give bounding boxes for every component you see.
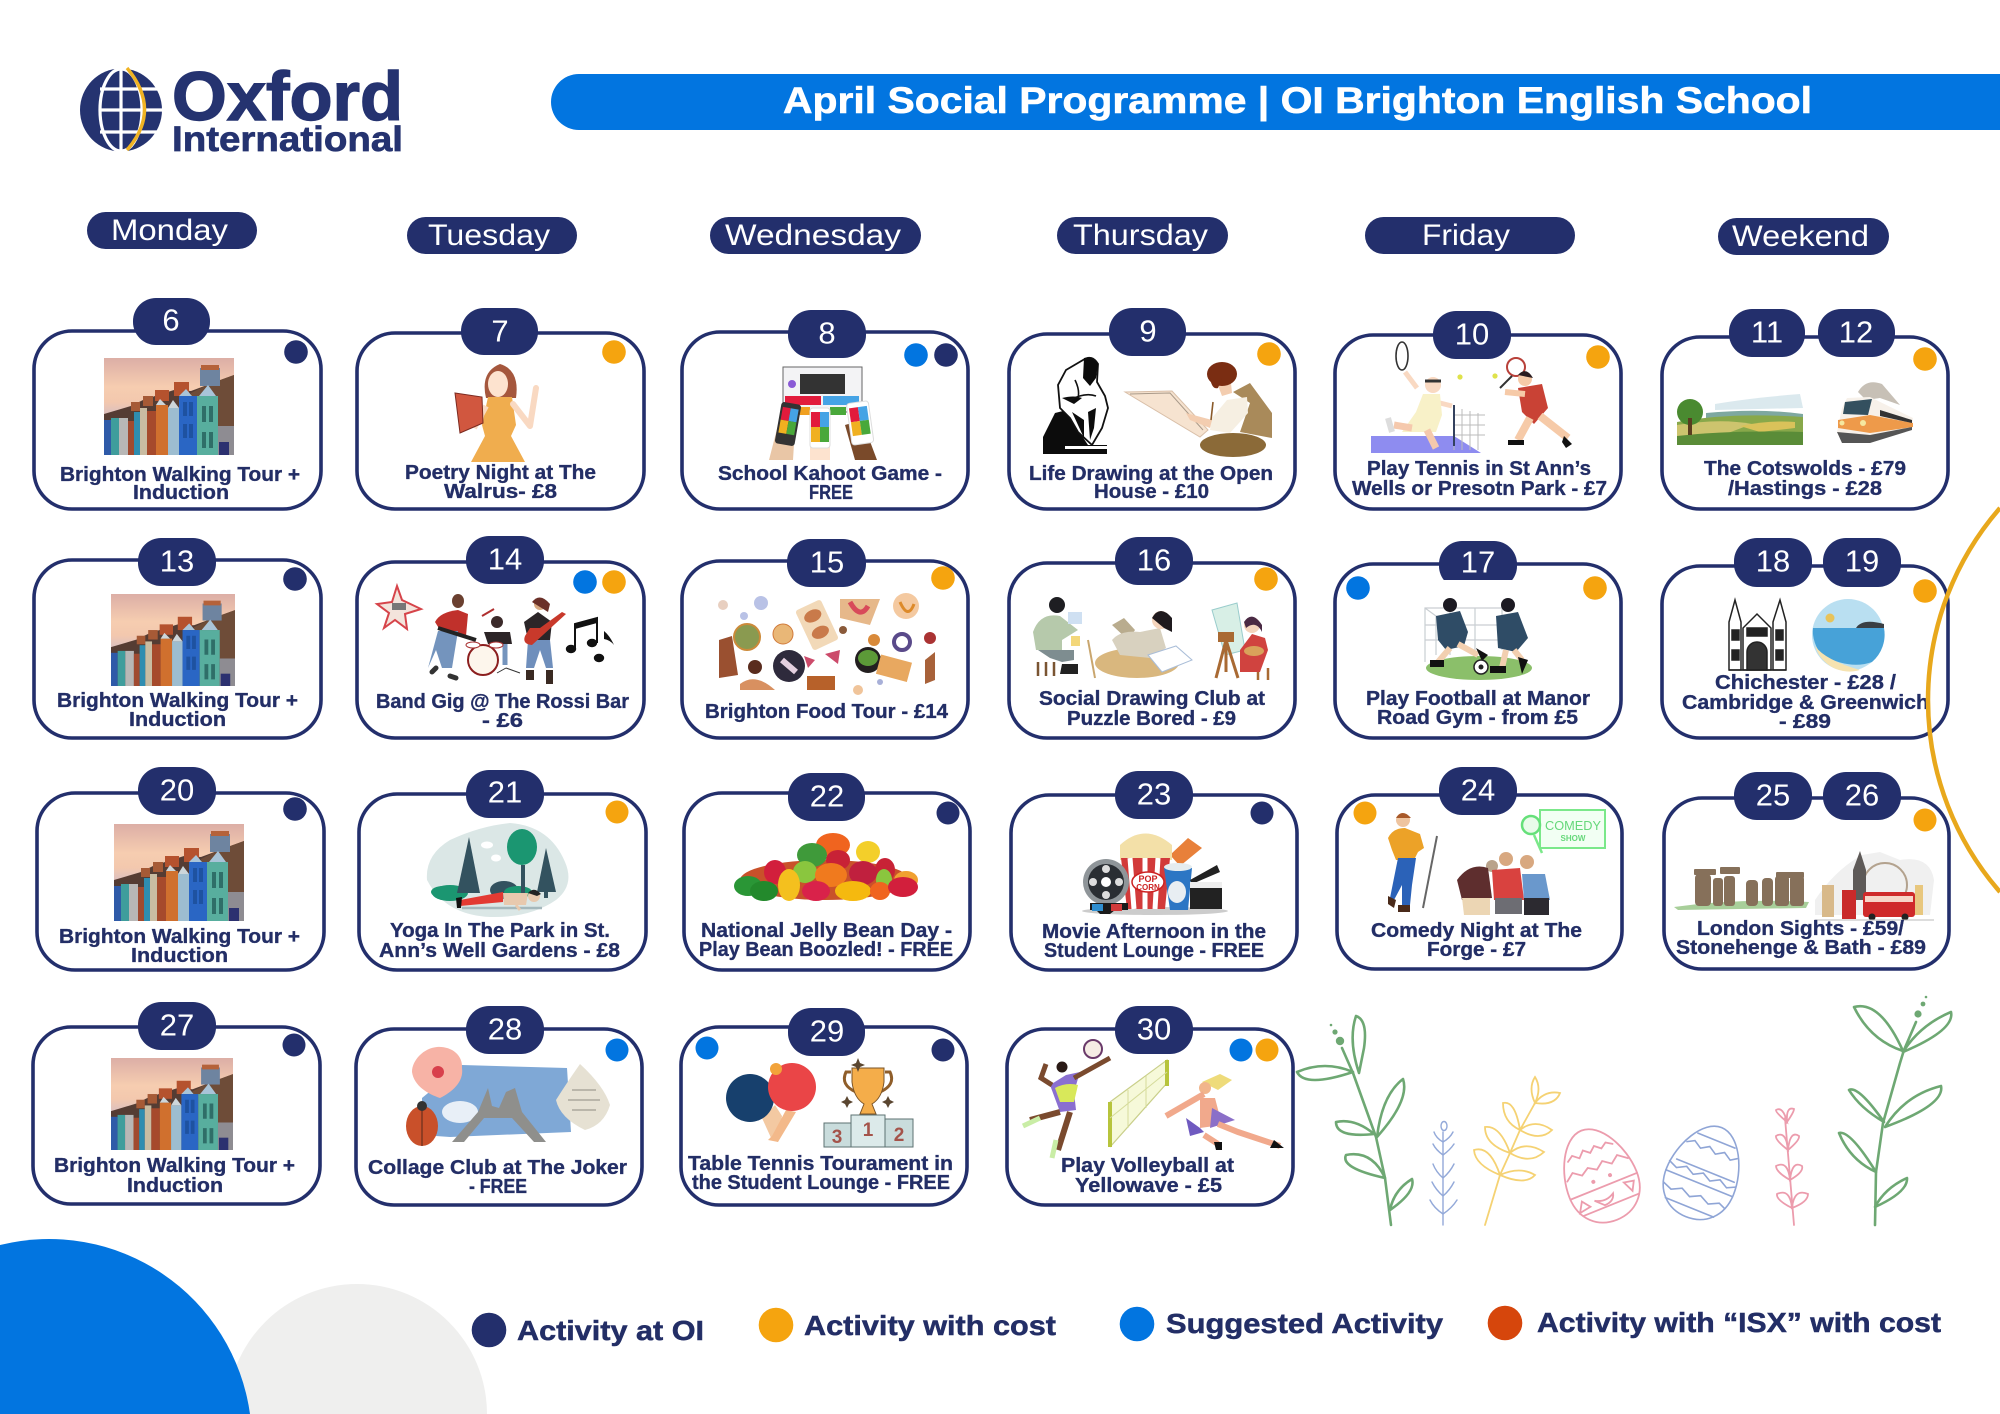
status dot: suggested [573, 570, 597, 594]
date badge 29 [788, 1008, 865, 1056]
date badge 18 [1734, 538, 1812, 587]
activity label [1029, 463, 1273, 503]
date badge 30: 30 [1137, 1012, 1171, 1046]
status dot: suggested [696, 1036, 718, 1060]
illustration: trophy on podium: 2 [894, 1125, 904, 1146]
date badge 6: 6 [162, 302, 180, 338]
activity label [60, 464, 300, 504]
date badge 8 [788, 310, 866, 358]
illustration: food spread [718, 593, 936, 695]
date badge 27 [138, 1002, 216, 1050]
activity label [1061, 1155, 1234, 1197]
activity label: Brighton Walking Tour + [60, 464, 300, 486]
activity label: Band Gig @ The Rossi Bar [376, 691, 629, 713]
date badge 14 [466, 536, 544, 584]
activity label [376, 691, 629, 732]
date badge 28 [466, 1006, 544, 1054]
activity label: Social Drawing Club at [1039, 688, 1265, 710]
activity label: Forge - £7 [1427, 939, 1526, 961]
status dot [1913, 347, 1937, 371]
date badge 21 [466, 770, 544, 818]
status dot [283, 567, 307, 591]
illustration: yoga in park [427, 823, 568, 917]
status dot [936, 802, 960, 824]
illustration: train [1837, 382, 1913, 443]
status dot [1257, 342, 1281, 366]
photo: Brighton houses [111, 594, 235, 686]
activity label [1352, 458, 1607, 500]
date badge 19 [1823, 538, 1901, 587]
activity label: Chichester - £28 / [1715, 672, 1896, 694]
day header: Weekend: Weekend [1732, 220, 1869, 253]
activity label: Ann’s Well Gardens - £8 [379, 940, 620, 962]
day header: Friday: Friday [1422, 219, 1510, 252]
date badge 19: 19 [1845, 544, 1879, 578]
illustration: cinema props: CORN [1136, 883, 1160, 892]
card: 13 Brighton Walking Tour [34, 538, 321, 738]
activity label [59, 926, 300, 967]
activity label: Collage Club at The Joker [368, 1157, 627, 1179]
status dot [931, 566, 955, 590]
card: 22 National Jelly Bean Day [684, 773, 970, 970]
activity label: Brighton Walking Tour + [59, 926, 300, 948]
title banner [551, 74, 2000, 130]
day header: Tuesday [407, 217, 577, 254]
date badge 20 [138, 767, 216, 815]
card: 10 Play Tennis [1335, 311, 1621, 509]
activity label: /Hastings - £28 [1728, 478, 1882, 500]
date badge 29: 29 [810, 1014, 844, 1048]
illustration: comedian [1388, 813, 1437, 912]
illustration: neon comedy sign: SHOW [1561, 834, 1586, 843]
legend item: activity at OI [472, 1313, 704, 1347]
activity label: Student Lounge - FREE [1044, 940, 1264, 962]
activity label: Play Football at Manor [1366, 688, 1590, 710]
activity label [57, 690, 298, 731]
day header: Monday [87, 212, 257, 249]
illustration: artists drawing [1033, 597, 1268, 680]
card: 29 Table Tennis Tournament [681, 1008, 967, 1205]
background circle: grey [227, 1284, 487, 1414]
legend item: suggested activity [1120, 1307, 1443, 1341]
title banner: April Social Programme | OI Brighton English School [783, 80, 1812, 122]
date badge 10: 10 [1455, 316, 1489, 352]
card: 28 Collage Club [356, 1006, 642, 1205]
illustration: laughing audience [1457, 852, 1550, 915]
status dot [284, 340, 308, 364]
date badge 30 [1115, 1006, 1193, 1054]
illustration: jelly beans [734, 833, 918, 901]
illustration: woman reading [455, 364, 536, 462]
card: 25-26 London Sights / Stonehenge & Bath [1664, 772, 1949, 969]
activity label: Play Volleyball at [1061, 1155, 1234, 1177]
activity label: The Cotswolds - £79 [1704, 458, 1906, 480]
illustration: cathedral [1729, 600, 1786, 670]
activity label: Puzzle Bored - £9 [1067, 708, 1236, 730]
activity label: Cambridge & Greenwich [1682, 692, 1929, 714]
status dot [606, 800, 628, 824]
illustration: paddles [726, 1063, 816, 1142]
activity label: the Student Lounge - FREE [692, 1172, 950, 1194]
date badge 9 [1109, 308, 1186, 356]
decoration: orange ring [1928, 508, 2000, 892]
activity label: - £89 [1779, 711, 1831, 733]
date badge 17 [1437, 541, 1519, 592]
illustration: tennis players [1371, 342, 1572, 453]
plant: yellow sprig [1474, 1077, 1560, 1225]
date badge 27: 27 [160, 1008, 194, 1042]
card: 16 Social Drawing Club [1009, 537, 1295, 738]
date badge 12 [1818, 309, 1895, 357]
activity label [1039, 688, 1265, 730]
plant: right green [1839, 996, 1951, 1225]
activity label [405, 462, 596, 503]
icon: blue Easter egg [1652, 1114, 1755, 1230]
date badge 13 [138, 538, 216, 586]
date badge 10 [1433, 311, 1511, 359]
card: 11-12 The Cotswolds / Hastings [1662, 309, 1948, 509]
card: 8 School Kahoot Game [682, 310, 968, 509]
illustration: volleyball match [1023, 1040, 1284, 1158]
activity label [688, 1153, 953, 1194]
date badge 22 [788, 773, 865, 821]
illustration: star sticker [377, 586, 421, 629]
activity label: London Sights - £59/ [1697, 918, 1904, 940]
date badge 7: 7 [491, 314, 509, 348]
illustration: cinema props: POP [1138, 874, 1158, 884]
activity label: FREE [809, 482, 853, 504]
date badge 12: 12 [1839, 314, 1873, 350]
status dot [606, 1038, 628, 1062]
activity label: Yoga In The Park in St. [390, 920, 610, 942]
legend item: suggested activity: Suggested Activity [1166, 1308, 1443, 1339]
date badge 13: 13 [160, 544, 194, 578]
photo: Brighton houses [114, 824, 244, 921]
activity label: Life Drawing at the Open [1029, 463, 1273, 485]
status dot [1586, 345, 1610, 369]
date badge 25 [1734, 772, 1812, 820]
status dot: at OI [932, 1038, 954, 1062]
illustration: neon comedy sign [1522, 810, 1605, 853]
status dot: suggested [1230, 1038, 1252, 1062]
card: 14 Band Gig [357, 536, 644, 738]
activity label: Brighton Walking Tour + [54, 1155, 295, 1177]
plant: pink sprig [1776, 1109, 1808, 1225]
illustration: thinker statue [1043, 358, 1108, 454]
date badge 28: 28 [488, 1012, 522, 1046]
date badge 11 [1729, 309, 1805, 357]
activity label [1042, 921, 1266, 962]
activity label: House - £10 [1094, 481, 1209, 503]
day header: Weekend [1718, 218, 1889, 255]
plant: left green [1297, 1016, 1413, 1225]
day header: Thursday: Thursday [1073, 219, 1208, 252]
card: 21 Yoga In The Park [359, 770, 646, 970]
date badge 7 [461, 308, 538, 355]
activity label: Walrus- £8 [444, 481, 557, 503]
status dot [1254, 567, 1278, 591]
card: 15 Brighton Food Tour [682, 539, 968, 738]
activity label [54, 1155, 295, 1197]
date badge 16: 16 [1137, 542, 1171, 578]
status dot: with cost [1583, 576, 1607, 600]
date badge 22: 22 [810, 778, 844, 814]
date badge 21: 21 [488, 774, 522, 810]
activity label: Brighton Food Tour - £14 [705, 701, 949, 723]
date badge 15 [787, 539, 866, 587]
date badge 23: 23 [1137, 776, 1171, 812]
status dot [1914, 808, 1936, 832]
logo: Oxford International [80, 58, 403, 159]
icon: globe [80, 68, 162, 152]
activity label: National Jelly Bean Day - [701, 920, 952, 942]
legend item: activity with ISX with cost: Activity with “ISX” with cost [1537, 1307, 1941, 1338]
decoration: Easter plants and eggs [1297, 996, 1951, 1233]
illustration: trophy on podium [824, 1058, 913, 1148]
activity label: Yellowave - £5 [1075, 1175, 1222, 1197]
illustration: football players [1425, 598, 1532, 680]
status dot: with cost [1256, 1038, 1278, 1062]
date badge 17: 17 [1461, 544, 1495, 580]
day header: Wednesday: Wednesday [725, 219, 901, 252]
card: 17 Play Football [1335, 541, 1621, 738]
illustration: beach [1812, 599, 1885, 672]
icon: music notes [566, 618, 614, 662]
activity label: - £6 [482, 710, 523, 732]
status dot: suggested [904, 343, 928, 367]
day header: Friday [1365, 217, 1575, 254]
date badge 20: 20 [160, 772, 194, 808]
card: 24 Comedy Night [1337, 767, 1622, 969]
day header: Tuesday: Tuesday [428, 219, 550, 252]
illustration: trophy on podium: 1 [863, 1120, 874, 1141]
date badge 16 [1115, 537, 1193, 585]
illustration: trophy on podium: 3 [832, 1127, 842, 1148]
legend item: activity at OI: Activity at OI [517, 1315, 704, 1346]
activity label: Induction [127, 1175, 223, 1197]
illustration: neon comedy sign: COMEDY [1545, 818, 1601, 833]
date badge 9: 9 [1139, 314, 1157, 348]
day header: Wednesday [710, 217, 921, 254]
card: 23 Movie Afternoon [1011, 771, 1297, 970]
status dot: with cost [602, 570, 626, 594]
illustration: Stonehenge [1674, 867, 1809, 910]
activity label [1366, 688, 1590, 729]
date badge 23 [1115, 771, 1193, 819]
status dot [602, 340, 626, 364]
status dot [1913, 579, 1937, 603]
illustration: countryside [1677, 394, 1803, 445]
activity label: Comedy Night at The [1371, 920, 1582, 942]
date badge 26: 26 [1845, 778, 1879, 812]
status dot [1354, 802, 1376, 824]
activity label: Road Gym - from £5 [1377, 707, 1578, 729]
illustration: artist at drawing board [1125, 362, 1272, 457]
activity label: Play Bean Boozled! - FREE [699, 939, 953, 961]
date badge 18: 18 [1756, 544, 1790, 578]
photo: Brighton houses [104, 358, 234, 455]
plant: blue lavender [1430, 1122, 1457, 1225]
date badge 24: 24 [1461, 772, 1495, 808]
activity label: Table Tennis Tourament in [688, 1153, 953, 1175]
photo: Brighton houses [111, 1058, 233, 1150]
legend item: activity with cost: Activity with cost [804, 1310, 1056, 1341]
illustration: band [428, 594, 566, 684]
activity label [718, 463, 942, 504]
card: 7 Poetry Night [357, 308, 644, 509]
status dot: suggested [1346, 576, 1370, 600]
legend [472, 1306, 1941, 1347]
activity label: Stonehenge & Bath - £89 [1676, 937, 1926, 959]
activity label: Wells or Presotn Park - £7 [1352, 478, 1607, 500]
date badge 24 [1439, 767, 1517, 815]
card: 30 Play Volleyball [1007, 1006, 1293, 1205]
date badge 6 [133, 298, 210, 345]
activity label [1371, 920, 1582, 961]
date badge 15: 15 [810, 544, 844, 580]
logo wordmark: Oxford [172, 58, 403, 135]
logo wordmark: International [172, 120, 403, 159]
activity label [1682, 672, 1929, 733]
activity label [699, 920, 953, 961]
status dot [283, 797, 307, 821]
activity label [1676, 918, 1926, 959]
date badge 14: 14 [488, 542, 522, 576]
day header: Monday: Monday [111, 214, 228, 247]
activity label [1704, 458, 1906, 500]
activity label: School Kahoot Game - [718, 463, 942, 485]
activity label: Brighton Walking Tour + [57, 690, 298, 712]
illustration: collage [406, 1047, 610, 1146]
activity label [379, 920, 620, 962]
activity label: Induction [131, 945, 228, 967]
status dot: at OI [934, 343, 958, 367]
background circle: blue [0, 1239, 250, 1414]
activity label: Movie Afternoon in the [1042, 921, 1266, 943]
card: 20 Brighton Walking Tour [37, 767, 324, 970]
date badge 8: 8 [818, 316, 836, 350]
date badge 25: 25 [1756, 778, 1790, 812]
illustration: cinema props [1082, 834, 1228, 915]
date badge 11: 11 [1751, 314, 1783, 350]
activity label [368, 1157, 627, 1198]
activity label: - FREE [469, 1176, 527, 1198]
illustration: Kahoot on phones [769, 367, 877, 460]
status dot [1250, 802, 1274, 824]
icon: pink Easter egg [1548, 1117, 1651, 1233]
status dot [282, 1034, 306, 1056]
activity label: Induction [133, 482, 229, 504]
day header: Thursday [1057, 217, 1228, 254]
card: 6 Brighton Walking Tour [34, 298, 321, 509]
activity label: Poetry Night at The [405, 462, 596, 484]
illustration: London landmarks [1815, 851, 1934, 920]
legend item: activity with cost [759, 1308, 1056, 1342]
activity label: Induction [129, 709, 226, 731]
date badge 26 [1823, 772, 1901, 820]
card: 18-19 Chichester / Cambridge / Greenwich [1662, 538, 1948, 738]
card: 9 Life Drawing [1009, 308, 1295, 509]
card: 27 Brighton Walking Tour [33, 1002, 320, 1204]
activity label: Play Tennis in St Ann’s [1367, 458, 1591, 480]
